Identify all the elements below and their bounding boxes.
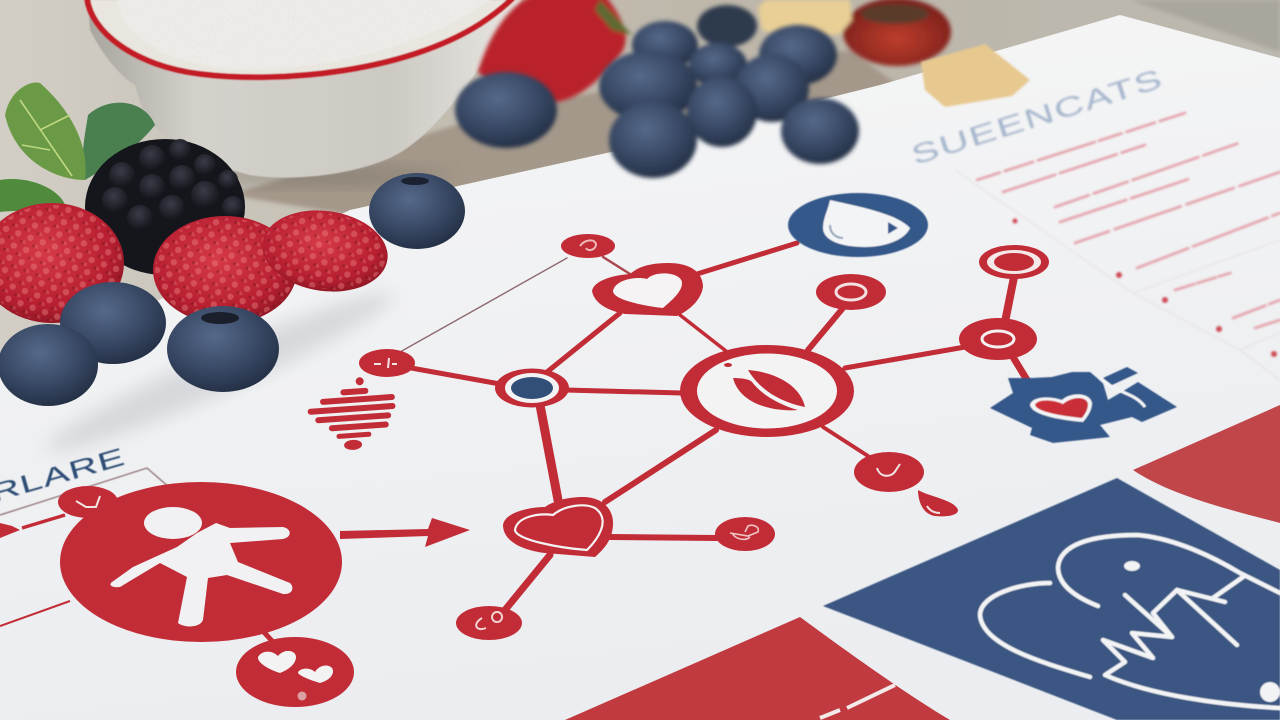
node: ring right: [959, 318, 1037, 360]
sugar: [118, 0, 492, 69]
bowl rim: [87, 0, 514, 77]
node: partial left edge: [0, 523, 20, 538]
node: blue centre: [495, 368, 569, 408]
node: central hub with leaf: [680, 345, 854, 437]
left raspberry: [0, 203, 124, 323]
left connectors: [0, 515, 70, 626]
node: person circle: [60, 482, 342, 642]
icon: stacked red lines: [306, 375, 398, 453]
blue panel with heart line: [823, 478, 1280, 720]
node: heart top: [592, 263, 703, 316]
top strawberry: [478, 0, 632, 102]
node: lower small right: [715, 517, 775, 551]
right raspberry: [257, 203, 393, 299]
icon: blue puzzle with heart: [990, 367, 1177, 443]
icon: heart elephant outline: [980, 535, 1280, 708]
brown table band: [230, 50, 905, 215]
node: small left tick: [58, 486, 118, 518]
background tomato and crackers: [758, 0, 951, 66]
icon: person: [110, 507, 292, 626]
node: bottom small: [456, 606, 522, 640]
network connector lines: [400, 243, 1027, 610]
panel outline: left box with heading: [0, 443, 170, 515]
mint leaves: [0, 82, 155, 212]
node: ring top right: [979, 245, 1049, 279]
connector: person to hearts: [260, 628, 274, 643]
node: blue water drop: [788, 193, 928, 257]
top right text panel: [908, 63, 1280, 380]
cracker: [921, 44, 1030, 107]
middle raspberry: [153, 216, 297, 324]
red corner panel right: [1133, 405, 1280, 523]
icon: red drop: [918, 490, 958, 516]
arrow: to the right: [340, 518, 470, 547]
node: two hearts: [236, 637, 354, 707]
list text: [977, 113, 1280, 328]
node: top small: [561, 234, 615, 258]
bullets: [1012, 218, 1277, 357]
node: left small: [359, 349, 415, 377]
blueberry cluster top: [455, 5, 859, 178]
shadow under left berries: [38, 276, 402, 468]
foreground blueberries: [0, 173, 465, 406]
node: heart lower: [503, 497, 613, 557]
red panel bottom: [565, 617, 950, 720]
panel outline: [955, 170, 1280, 380]
sugar bowl: [87, 0, 522, 186]
heading: SUEENCATS: [908, 63, 1167, 171]
node: ring upper centre right: [816, 274, 886, 310]
grey right table corner: [1130, 0, 1280, 52]
blackberry: [85, 139, 245, 275]
node: lower right: [854, 452, 924, 492]
